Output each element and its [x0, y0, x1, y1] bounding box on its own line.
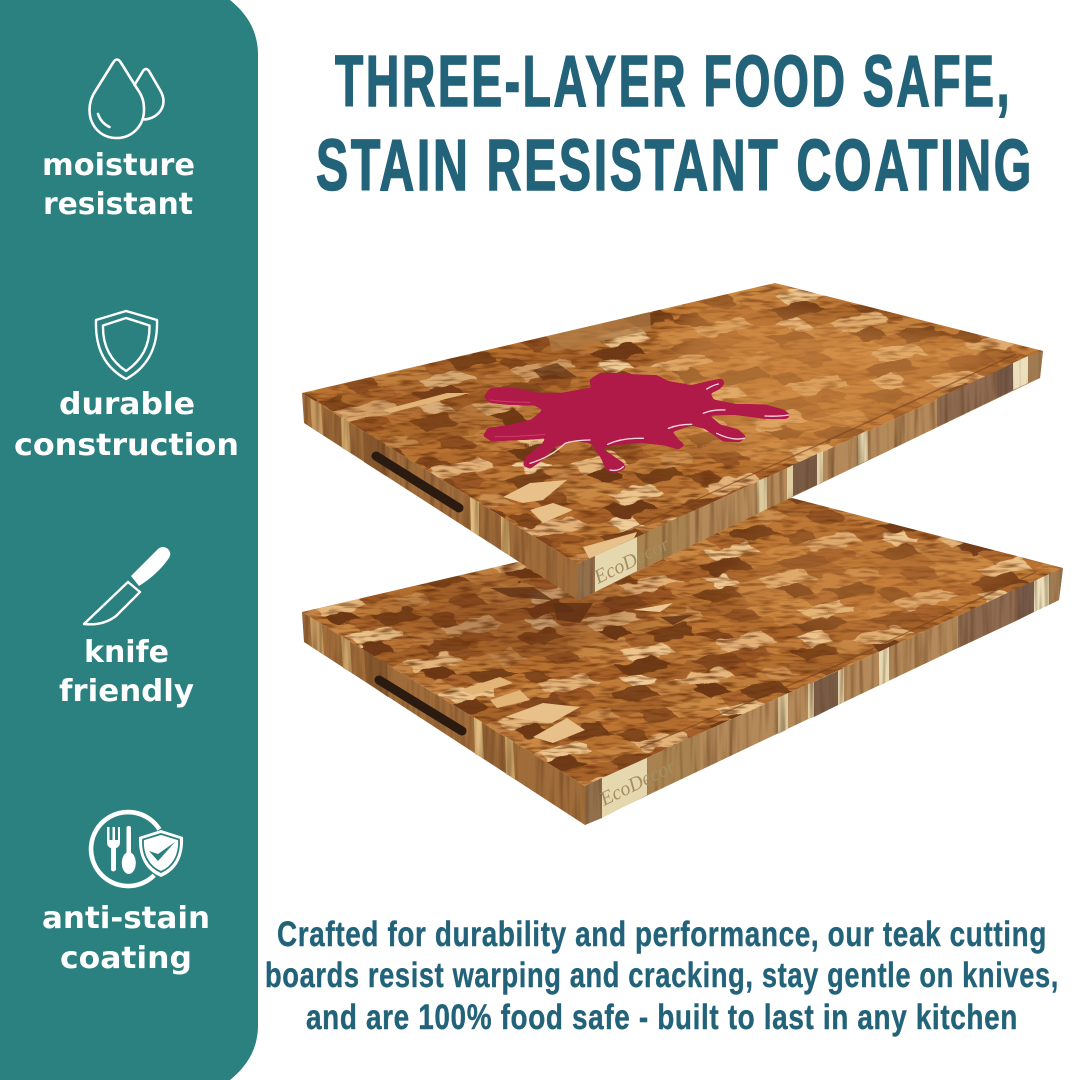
board left edge — [302, 393, 578, 600]
feature: moisture resistant — [42, 60, 195, 222]
label: moisture resistant: moisture — [42, 148, 195, 183]
handle slot — [376, 456, 459, 508]
handle slot — [379, 680, 462, 731]
icon: plate, cutlery and shield — [91, 812, 183, 886]
cream end block — [595, 537, 637, 592]
board right edge — [585, 568, 1063, 825]
board top surface — [302, 498, 1063, 786]
icon: water drops — [90, 60, 164, 138]
label: anti-stain coating: coating — [60, 941, 192, 976]
cream end block — [602, 758, 647, 818]
board top surface — [302, 283, 1043, 558]
feature: knife friendly — [59, 547, 194, 709]
board left edge — [302, 612, 585, 825]
icon: shield — [96, 311, 157, 379]
juice groove — [620, 354, 1016, 534]
feature: anti-stain coating — [42, 812, 210, 976]
board right edge — [578, 351, 1043, 600]
juice groove — [640, 572, 1036, 748]
label: moisture resistant: resistant — [43, 187, 193, 222]
red stain splash — [483, 373, 790, 473]
panel: left feature sidebar — [0, 0, 258, 1080]
cutting board: lower — [280, 480, 1080, 825]
label: knife friendly: friendly — [59, 674, 194, 709]
engraved brand: EcoDecor — [596, 755, 679, 811]
icon: knife — [84, 547, 170, 624]
label: anti-stain coating: anti-stain — [42, 901, 210, 936]
label: knife friendly: knife — [84, 635, 169, 670]
label: durable construction: construction — [14, 428, 239, 463]
cutting board: upper with stain — [302, 283, 1043, 600]
sidebar background — [0, 0, 258, 1080]
feature: durable construction — [14, 311, 239, 463]
stain highlights — [490, 384, 789, 470]
engraved brand: EcoDecor — [590, 533, 673, 589]
label: durable construction: durable — [59, 387, 195, 422]
